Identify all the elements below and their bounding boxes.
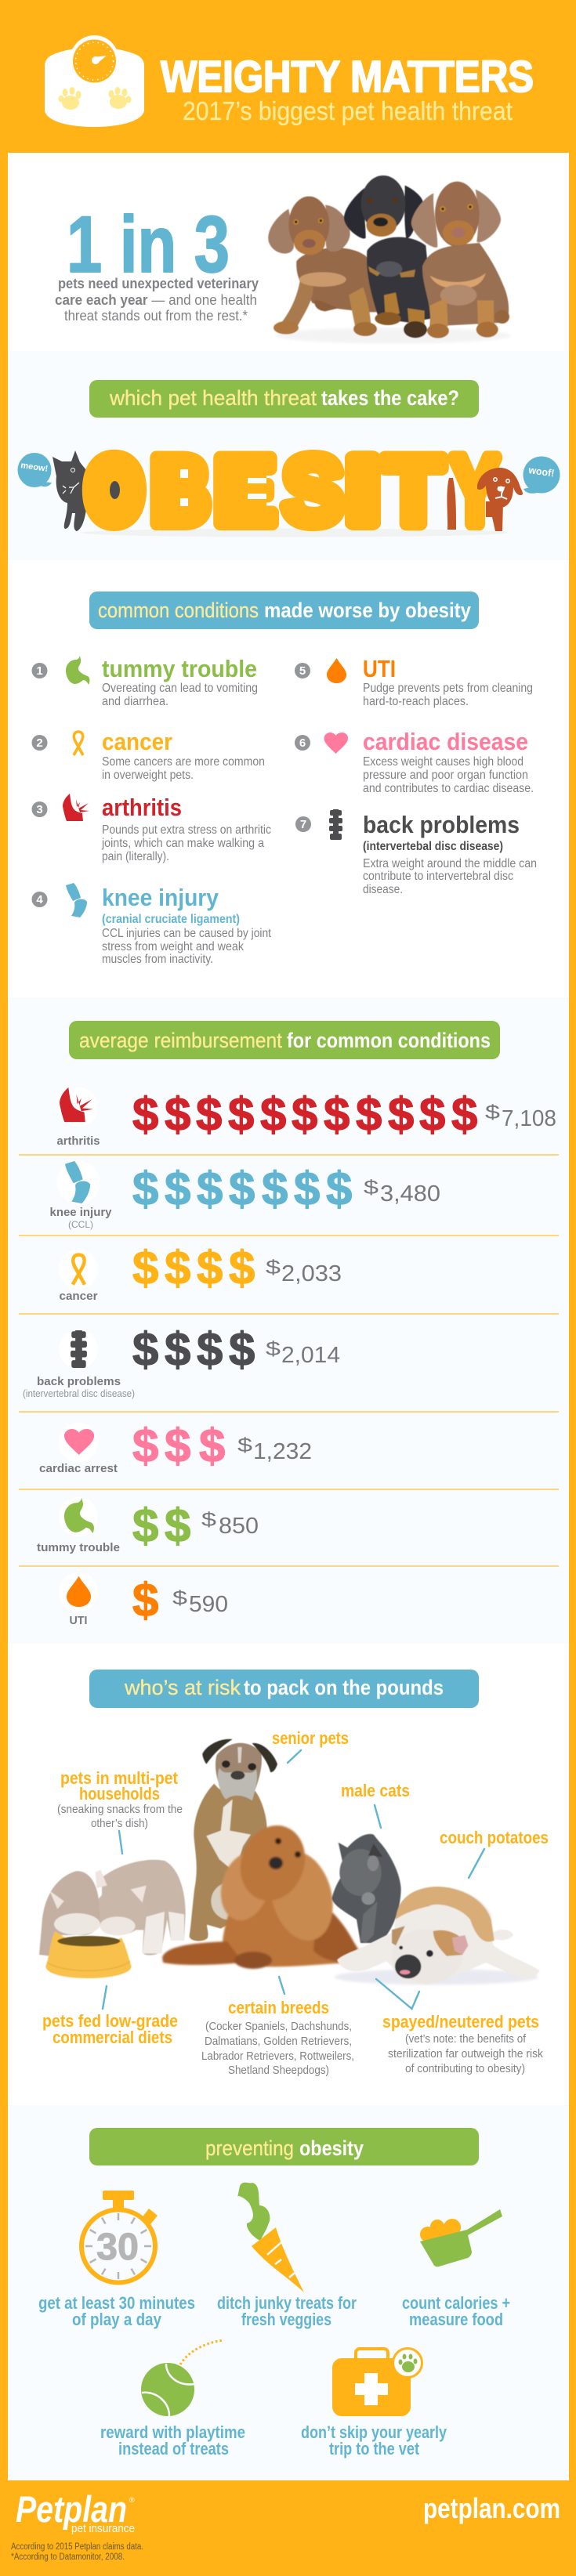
big word: OBESITY: S — [283, 437, 343, 544]
row: tummy trouble reimbursement: 850 — [219, 1514, 259, 1539]
text: sources: *According to Datamonitor, 2008. — [11, 2552, 125, 2562]
row: knee injury reimbursement — [50, 1160, 440, 1230]
heading pill: which pet health threat — [89, 380, 479, 418]
heading pill: who's at risk: to pack on the pounds — [244, 1676, 444, 1699]
condition 4: knee injury: stress from weight and weak — [102, 940, 245, 953]
icon: stopwatch: 30 — [96, 2227, 139, 2268]
condition 6: cardiac disease: pressure and poor organ function — [363, 769, 528, 782]
condition 3: arthritis: arthritis — [102, 794, 182, 821]
condition 6: cardiac disease: and contributes to cardiac disease. — [363, 782, 534, 795]
shadow under obesity letters — [82, 528, 508, 537]
icon: tennis ball with dotted trail — [141, 2340, 224, 2416]
label: certain breeds: Labrador Retrievers, Rottweilers, — [201, 2050, 354, 2063]
heading pill: common conditions: common conditions — [98, 599, 259, 622]
text: veggies tip: fresh veggies — [241, 2310, 331, 2329]
row: knee injury reimbursement: knee injury — [50, 1206, 112, 1219]
label: senior pets — [272, 1728, 349, 1763]
text: vet tip — [301, 2422, 447, 2458]
condition 4: knee injury: knee injury — [102, 884, 219, 911]
row: cardiac arrest reimbursement: 1,232 — [253, 1439, 312, 1464]
condition 7: back problems: back problems — [363, 811, 520, 838]
heading pill: average reimbursement: for common conditions — [287, 1029, 491, 1052]
row: tummy trouble reimbursement: $$ — [132, 1500, 190, 1552]
illustration: dog head — [477, 468, 523, 508]
label: couch potatoes — [440, 1828, 549, 1878]
condition 7: back problems — [295, 809, 537, 896]
condition 7: back problems: disease. — [363, 883, 403, 896]
text: calories tip: count calories + — [402, 2293, 510, 2313]
text: playtime tip — [100, 2422, 245, 2458]
label: pets in multi-pet households: households — [79, 1784, 160, 1804]
condition 4: knee injury: CCL injuries can be caused by joint — [102, 927, 271, 940]
icon: carrot — [237, 2183, 304, 2292]
photo: three puppies — [268, 175, 511, 343]
speech bubble: meow: meow! — [20, 461, 49, 474]
big word: OBESITY: T — [384, 437, 443, 544]
photo: grey cat and bulldog — [331, 1834, 539, 1984]
row: knee injury reimbursement: 3,480 — [380, 1181, 440, 1207]
heading pill: average reimbursement — [69, 1021, 500, 1059]
row: cancer reimbursement: $$$$ — [132, 1242, 255, 1294]
row: cardiac arrest reimbursement: $$$ — [132, 1420, 225, 1472]
label: male cats — [341, 1781, 410, 1828]
label: certain breeds: (Cocker Spaniels, Dachshunds, — [205, 2020, 352, 2033]
text: calories tip: measure food — [409, 2310, 503, 2329]
icon: first aid kit with paw badge — [332, 2349, 422, 2416]
condition 4: knee injury — [31, 883, 271, 966]
row: cancer reimbursement: cancer — [60, 1290, 98, 1303]
heading pill: preventing obesity: preventing — [205, 2136, 294, 2160]
condition 6: cardiac disease: cardiac disease — [363, 728, 528, 755]
row: arthritis reimbursement — [56, 1087, 556, 1148]
logo: Petplan: Petplan — [16, 2488, 127, 2530]
row: UTI reimbursement: $ — [172, 1587, 187, 1609]
condition 2: cancer: in overweight pets. — [102, 769, 194, 782]
panel: reimbursement background — [8, 997, 569, 1644]
illustration: cat behind letter O — [53, 450, 86, 531]
text: vet tip: don’t skip your yearly — [301, 2422, 447, 2442]
label: certain breeds — [201, 1977, 354, 2077]
label: pets fed low-grade commercial diets: commercial diets — [53, 2028, 172, 2047]
row: UTI reimbursement: 590 — [189, 1592, 228, 1617]
condition 7: back problems: 7 — [300, 818, 306, 831]
row: knee injury reimbursement: $ — [364, 1177, 379, 1199]
icon: pet scale logo — [45, 35, 144, 127]
row: arthritis reimbursement: $ — [485, 1102, 500, 1123]
condition 5: UTI — [295, 655, 533, 708]
heading pill: who's at risk — [89, 1670, 479, 1708]
row: back problems reimbursement: $ — [266, 1338, 281, 1360]
text: sources: According to 2015 Petplan claims data. — [11, 2542, 143, 2552]
heading pill: average reimbursement: average reimbursement — [79, 1029, 282, 1052]
speech bubble: woof — [523, 456, 560, 494]
label: pets in multi-pet households — [57, 1768, 183, 1854]
text: veggies tip — [217, 2293, 357, 2329]
heading pill: which pet health threat: which pet health threat — [109, 386, 317, 410]
heading pill: common conditions — [89, 592, 479, 629]
big word: OBESITY: B — [150, 437, 210, 544]
speech bubble: meow — [17, 453, 52, 487]
text: stat description: threat stands out from the rest.* — [64, 308, 248, 324]
condition 1: tummy trouble — [31, 655, 258, 708]
condition 3: arthritis: joints, which can make walking a — [101, 837, 264, 850]
condition 6: cardiac disease: Excess weight causes high blood — [363, 755, 523, 769]
condition 7: back problems: Extra weight around the middle can — [363, 857, 537, 870]
row: back problems reimbursement: 2,014 — [281, 1343, 340, 1368]
condition 1: tummy trouble: 1 — [36, 664, 43, 678]
text: play tip: of play a day — [72, 2310, 162, 2329]
row: tummy trouble reimbursement — [37, 1497, 259, 1554]
row: back problems reimbursement — [23, 1323, 340, 1399]
label: couch potatoes: couch potatoes — [440, 1828, 549, 1847]
text: play tip — [38, 2293, 195, 2329]
label: spayed/neutered pets: (vet’s note: the benefits of — [405, 2032, 527, 2046]
label: pets in multi-pet households: other’s dish) — [91, 1817, 148, 1830]
big word: OBESITY: O — [85, 437, 144, 544]
text: sources — [11, 2542, 143, 2562]
condition 4: knee injury: 4 — [36, 893, 43, 906]
label: pets fed low-grade commercial diets — [42, 1986, 178, 2047]
row: cancer reimbursement: 2,033 — [281, 1261, 342, 1286]
icon: measuring scoop with food — [420, 2209, 502, 2267]
condition 7: back problems: (intervertebal disc disease) — [363, 840, 503, 853]
heading pill: who's at risk: who’s at risk — [124, 1676, 241, 1699]
heading pill: preventing obesity — [89, 2128, 479, 2165]
condition 4: knee injury: muscles from inactivity. — [102, 953, 213, 966]
speech bubble: woof: woof! — [527, 464, 555, 479]
illustration: dog tail and leg behind letters — [447, 478, 503, 531]
condition 6: cardiac disease: 6 — [299, 736, 306, 750]
condition 2: cancer: cancer — [102, 728, 172, 755]
big word: OBESITY: Y — [451, 437, 498, 544]
condition 2: cancer: Some cancers are more common — [102, 755, 265, 769]
stat: 1 in 3: 1 in 3 — [67, 200, 230, 289]
row: knee injury reimbursement: (CCL) — [68, 1219, 93, 1230]
panel: prevention background — [8, 2105, 569, 2480]
label: certain breeds: Dalmatians, Golden Retrievers, — [205, 2035, 352, 2048]
text: stat description: pets need unexpected veterinary — [58, 276, 259, 291]
condition 4: knee injury: (cranial cruciate ligament) — [102, 913, 240, 926]
photo: cocker spaniel — [162, 1816, 363, 1969]
condition 5: UTI: 5 — [299, 664, 306, 678]
row: tummy trouble reimbursement: $ — [201, 1509, 216, 1531]
text: calories tip — [402, 2293, 510, 2329]
label: pets in multi-pet households: (sneaking snacks from the — [57, 1803, 183, 1816]
label: pets fed low-grade commercial diets: pets fed low-grade — [42, 2011, 178, 2031]
condition 3: arthritis: pain (literally). — [102, 850, 169, 863]
row: arthritis reimbursement: arthritis — [56, 1134, 100, 1148]
condition 1: tummy trouble: tummy trouble — [102, 655, 257, 682]
big word: OBESITY: I — [346, 437, 380, 544]
big word: OBESITY: E — [214, 437, 276, 544]
text: vet tip: trip to the vet — [329, 2439, 420, 2458]
label: senior pets: senior pets — [272, 1728, 349, 1748]
text: play tip: get at least 30 minutes — [38, 2293, 195, 2313]
condition 1: tummy trouble: Overeating can lead to vomiting — [102, 682, 258, 695]
text: playtime tip: instead of treats — [118, 2439, 229, 2458]
big word: OBESITY — [85, 437, 498, 544]
photo: huskies, bowl and senior boxer — [39, 1739, 277, 1978]
subtitle: 2017’s biggest pet health threat — [183, 96, 513, 125]
label: certain breeds: certain breeds — [228, 1998, 329, 2017]
text: playtime tip: reward with playtime — [100, 2422, 245, 2442]
condition 5: UTI: Pudge prevents pets from cleaning — [363, 682, 533, 695]
row: UTI reimbursement — [59, 1572, 228, 1627]
text: veggies tip: ditch junky treats for — [217, 2293, 357, 2313]
panel: obesity reveal background — [8, 351, 569, 560]
condition 5: UTI: hard-to-reach places. — [363, 695, 469, 708]
heading pill: preventing obesity: obesity — [299, 2136, 364, 2160]
row: UTI reimbursement: UTI — [69, 1614, 88, 1627]
label: spayed/neutered pets: sterilization far outweigh the risk — [388, 2047, 543, 2060]
row: knee injury reimbursement: $$$$$$$ — [132, 1163, 352, 1215]
row: cardiac arrest reimbursement: cardiac arrest — [39, 1462, 118, 1475]
logo: Petplan: ® — [129, 2496, 135, 2504]
row: cancer reimbursement — [59, 1242, 342, 1303]
condition 1: tummy trouble: and diarrhea. — [102, 695, 168, 708]
label: certain breeds: Shetland Sheepdogs) — [228, 2064, 329, 2077]
condition 2: cancer — [31, 728, 265, 782]
logo: Petplan: pet insurance — [71, 2522, 135, 2535]
label: spayed/neutered pets — [376, 1979, 543, 2075]
condition 7: back problems: contribute to intervertebral disc — [363, 870, 513, 883]
heading pill: which pet health threat: takes the cake? — [321, 386, 459, 410]
condition 3: arthritis: 3 — [36, 803, 43, 816]
label: pets in multi-pet households: pets in multi-pet — [60, 1768, 179, 1788]
icon: stopwatch — [82, 2191, 158, 2283]
label: male cats: male cats — [341, 1781, 410, 1800]
row: cardiac arrest reimbursement: $ — [237, 1435, 252, 1456]
row: back problems reimbursement: $$$$ — [132, 1323, 255, 1376]
text: stat description — [55, 276, 259, 324]
row: arthritis reimbursement: 7,108 — [502, 1106, 556, 1131]
heading pill: common conditions: made worse by obesity — [264, 599, 471, 622]
row: arthritis reimbursement: $$$$$$$$$$$ — [132, 1088, 477, 1141]
row: back problems reimbursement: (intervertebral disc disease) — [23, 1388, 135, 1399]
condition 3: arthritis: Pounds put extra stress on arthritic — [102, 823, 271, 837]
row: UTI reimbursement: $ — [132, 1574, 158, 1626]
condition 6: cardiac disease — [295, 728, 534, 795]
row: back problems reimbursement: back problems — [37, 1375, 121, 1388]
condition 3: arthritis — [31, 794, 271, 863]
label: spayed/neutered pets: spayed/neutered pets — [382, 2012, 539, 2031]
label: spayed/neutered pets: of contributing to obesity) — [405, 2062, 525, 2075]
row: tummy trouble reimbursement: tummy trouble — [37, 1541, 120, 1554]
text: stat description: care each year — and one health — [55, 292, 257, 308]
condition 2: cancer: 2 — [36, 736, 43, 750]
row: cancer reimbursement: $ — [266, 1257, 281, 1279]
condition 5: UTI: UTI — [363, 655, 396, 682]
row: cardiac arrest reimbursement — [39, 1420, 312, 1475]
